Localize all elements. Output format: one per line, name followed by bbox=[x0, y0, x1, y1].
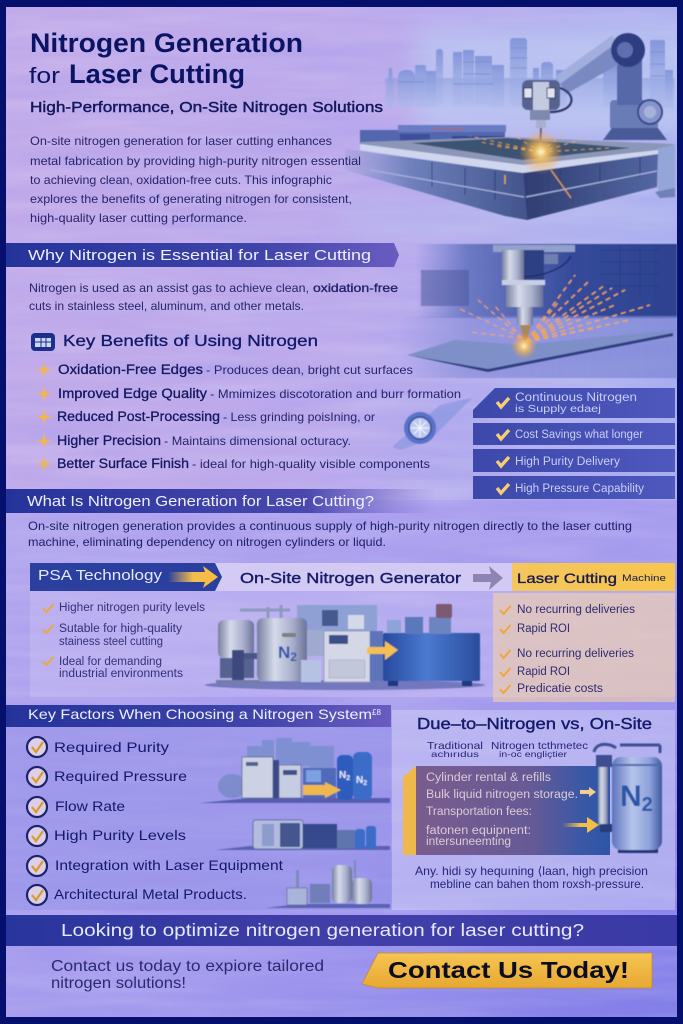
factor illustration: generator with N2 cylinders: N bbox=[356, 775, 363, 786]
factor 5: Integration with Laser Equipment bbox=[55, 857, 283, 873]
benefit 4: - Maintains dimensional octuracy. bbox=[164, 434, 351, 448]
benefit 5: Better Surface Finish bbox=[57, 456, 189, 471]
tag: continuous nitrogen bbox=[473, 388, 675, 418]
tag: cost savings: Cost Savings what longer bbox=[515, 429, 643, 441]
cost list box: Cylinder rental & refills bbox=[426, 772, 551, 784]
benefit 3: Reduced Post-Processing bbox=[57, 409, 220, 424]
benefit 3: - Less grinding poisIning, or bbox=[223, 410, 375, 424]
factor illustration: compact generator bbox=[215, 820, 390, 850]
sparks bbox=[458, 275, 650, 342]
savings panel: No recurring deliveries bbox=[517, 604, 635, 616]
PSA technology step bbox=[30, 563, 222, 591]
title: for bbox=[29, 63, 60, 88]
factor illustration: generator with N2 cylinders: 2 bbox=[346, 775, 350, 782]
icon: nozzle lens bbox=[392, 398, 472, 450]
comparison panel bbox=[392, 710, 675, 910]
benefit 5: - ideal for high-quality visible components bbox=[192, 457, 430, 471]
PSA benefits list: Sutable for high-quality bbox=[59, 623, 182, 635]
section heading: why nitrogen: Why Nitrogen is Essential for Laser Cutting bbox=[28, 247, 371, 264]
laser cutting machine step: Laser Cutting bbox=[517, 570, 617, 586]
benefit 2: - Mmimizes discotoration and burr formation bbox=[210, 387, 461, 401]
why nitrogen paragraph: cuts in stainless steel, aluminum, and other metals. bbox=[29, 299, 304, 313]
on-site N2 tank: 2 bbox=[642, 794, 653, 816]
PSA benefits list: stainess steel cutting bbox=[59, 636, 163, 648]
PSA benefits list: industrial environments bbox=[59, 668, 183, 680]
column labels: Nitrogen tcthmetec bbox=[491, 740, 588, 752]
robot arm bbox=[522, 33, 667, 150]
benefit 2: Improved Edge Quality bbox=[58, 386, 207, 401]
section heading: why nitrogen bbox=[6, 243, 399, 267]
factor illustration: tanks bbox=[265, 860, 390, 908]
benefit 1: Oxidation-Free Edges bbox=[58, 362, 203, 377]
PSA benefits list: Ideal for demanding bbox=[59, 656, 162, 668]
factor 6: Architectural Metal Products. bbox=[54, 886, 247, 902]
factor 1: Required Purity bbox=[54, 739, 169, 755]
title bbox=[29, 28, 303, 89]
PSA technology step: PSA Technology bbox=[38, 568, 163, 584]
factor 5 bbox=[27, 856, 283, 876]
PSA benefits list: Higher nitrogen purity levels bbox=[59, 602, 205, 614]
cost list box: fatonen equipnent: bbox=[426, 825, 531, 837]
icon: toolbox bbox=[31, 333, 55, 351]
column labels bbox=[427, 740, 588, 759]
intro paragraph: to achieving clean, oxidation-free cuts. This infographic bbox=[30, 174, 332, 187]
factor 1 bbox=[27, 737, 169, 757]
arrow: small bbox=[580, 787, 596, 797]
PSA benefits list bbox=[43, 602, 205, 680]
comparison caption bbox=[415, 864, 648, 891]
key factors checklist bbox=[27, 737, 283, 905]
savings panel: Rapid ROI bbox=[517, 623, 570, 635]
factor 3: Flow Rate bbox=[55, 798, 125, 814]
column labels: achırıdus bbox=[431, 749, 479, 759]
comparison caption: mebline can bahen thom roxsh-pressure. bbox=[430, 877, 644, 891]
why nitrogen paragraph bbox=[29, 281, 399, 313]
savings panel: Predicatie costs bbox=[517, 683, 603, 695]
section heading: what is nitrogen generation: What Is Nitrogen Generation for Laser Cutting? bbox=[27, 493, 374, 510]
factor 2: Required Pressure bbox=[54, 768, 187, 784]
spindle bbox=[493, 245, 575, 341]
title: Nitrogen Generation bbox=[30, 28, 303, 58]
benefit 3 bbox=[36, 409, 375, 425]
comparison heading: Due–to–Nitrogen vs, On-Site bbox=[417, 716, 652, 733]
savings panel bbox=[493, 593, 675, 702]
subtitle: High-Performance, On-Site Nitrogen Solutions bbox=[30, 99, 383, 116]
why nitrogen paragraph: oxidation-free bbox=[313, 281, 399, 295]
contact button bbox=[362, 953, 652, 988]
what is paragraph: machine, eliminating dependency on nitrogen cylinders or liquid. bbox=[28, 535, 386, 549]
benefit 5 bbox=[36, 456, 430, 472]
tag: high pressure: High Pressure Capability bbox=[515, 483, 644, 495]
comparison caption: Any. hidi sy hequıning ⟨laan, high precision bbox=[415, 864, 648, 878]
factor illustration: generator with N2 cylinders: 2 bbox=[363, 780, 367, 787]
section heading: key factors bbox=[6, 705, 391, 727]
arrow: large bbox=[562, 817, 599, 833]
benefits list bbox=[36, 362, 461, 472]
cost list box bbox=[403, 766, 610, 855]
call-to-action banner bbox=[6, 915, 677, 946]
intro paragraph: On-site nitrogen generation for laser cutting enhances bbox=[30, 135, 332, 148]
benefit 4: Higher Precision bbox=[57, 433, 161, 448]
laser cutting machine step bbox=[512, 563, 675, 591]
cutting plate bbox=[407, 330, 673, 370]
tag: cost savings bbox=[473, 423, 675, 445]
section heading: key factors: Key Factors When Choosing a Nitrogen System bbox=[28, 706, 372, 722]
factory skyline bbox=[385, 38, 675, 108]
tag: high purity delivery: High Purity Delivery bbox=[515, 456, 620, 468]
cost list box: Transportation fees: bbox=[426, 806, 532, 818]
generator machine illustration: 2 bbox=[290, 650, 297, 664]
factor 2 bbox=[27, 767, 187, 787]
benefit 1: - Produces dean, bright cut surfaces bbox=[206, 363, 413, 377]
benefit 2 bbox=[36, 386, 461, 402]
cost list box: Bulk liquid nitrogen storage. bbox=[426, 789, 578, 801]
benefit 4 bbox=[36, 433, 351, 449]
column labels: Traditional bbox=[427, 740, 483, 752]
savings panel: Rapid ROI bbox=[517, 666, 570, 678]
factor 4: High Purity Levels bbox=[54, 827, 186, 843]
what is paragraph bbox=[28, 519, 632, 549]
title: Laser Cutting bbox=[69, 59, 245, 89]
why nitrogen paragraph: Nitrogen is used as an assist gas to achieve clean, bbox=[29, 281, 309, 295]
arrow: generator output bbox=[367, 641, 398, 660]
call-to-action banner: Looking to optimize nitrogen generation for laser cutting? bbox=[61, 920, 584, 940]
table top bbox=[360, 137, 675, 170]
on-site generator step: On-Site Nitrogen Generator bbox=[240, 570, 461, 587]
factor 6 bbox=[27, 885, 247, 905]
process panel bbox=[30, 563, 675, 702]
tag: high purity delivery bbox=[473, 449, 675, 472]
benefit tags panel bbox=[473, 388, 675, 499]
tag: continuous nitrogen: Continuous Nitrogen bbox=[515, 392, 637, 404]
column labels: in-oc engliçtier bbox=[499, 749, 567, 759]
laser cutting machine step: Machine bbox=[622, 573, 666, 583]
intro paragraph: explores the benefits of generating nitrogen for consistent, bbox=[30, 193, 352, 206]
generator machine illustration: N bbox=[278, 643, 290, 662]
intro paragraph: high-quality laser cutting performance. bbox=[30, 212, 247, 225]
savings panel: No recurring deliveries bbox=[517, 648, 634, 660]
factor 4 bbox=[27, 826, 186, 846]
on-site N2 tank bbox=[594, 744, 662, 853]
factor illustration: generator with N2 cylinders bbox=[200, 738, 390, 803]
section heading: what is nitrogen generation bbox=[6, 489, 436, 513]
intro paragraph: metal fabrication by providing high-purity nitrogen essential bbox=[30, 155, 361, 168]
benefit 1 bbox=[36, 362, 413, 378]
sparks bbox=[470, 132, 610, 152]
key factors panel background bbox=[6, 727, 391, 910]
cost list box: intersuneemting bbox=[426, 836, 511, 848]
intro paragraph bbox=[30, 135, 361, 225]
factor 3 bbox=[27, 797, 125, 817]
what is paragraph: On-site nitrogen generation provides a continuous supply of high-purity nitrogen directly to the laser cutting bbox=[28, 519, 632, 533]
factor illustration: generator with N2 cylinders: N bbox=[339, 770, 346, 781]
tag: high pressure bbox=[473, 476, 675, 499]
small machine at back of table bbox=[360, 125, 506, 146]
contact prompt: Contact us today to expiore tailored bbox=[51, 958, 324, 975]
contact prompt bbox=[51, 958, 324, 992]
on-site N2 tank: N bbox=[620, 780, 642, 813]
section heading: key factors: £8 bbox=[372, 708, 381, 717]
arrow: generator to laser bbox=[473, 566, 503, 590]
contact button: Contact Us Today! bbox=[388, 957, 629, 983]
generator machine illustration bbox=[205, 604, 485, 690]
hero illustration: laser cutting table and robot arm bbox=[345, 33, 675, 220]
tag: continuous nitrogen: is Supply edaej bbox=[515, 404, 601, 415]
table sides bbox=[345, 149, 527, 220]
laser cutting close-up illustration bbox=[400, 244, 677, 378]
key benefits heading: Key Benefits of Using Nitrogen bbox=[63, 333, 318, 350]
contact prompt: nitrogen solutions! bbox=[51, 975, 186, 992]
